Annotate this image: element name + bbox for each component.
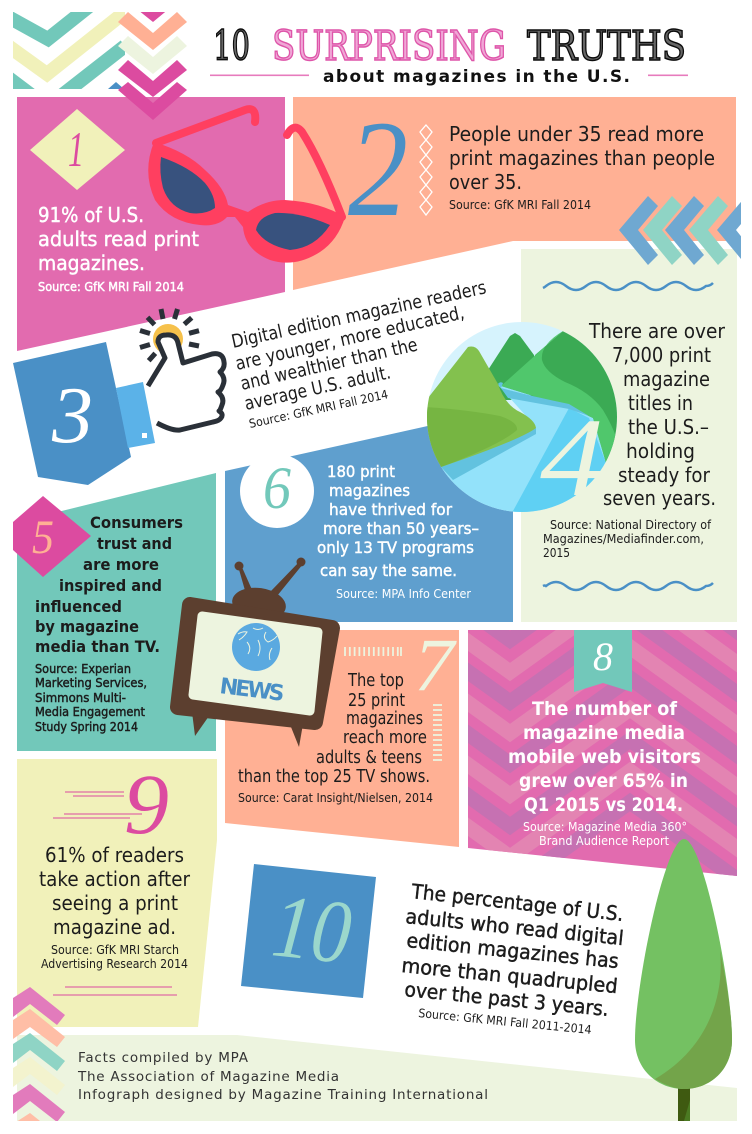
subtitle: about magazines in the U.S.	[323, 67, 630, 87]
panel 2: peach	[293, 97, 736, 290]
panel 5 text: influenced	[35, 597, 122, 616]
panel 3 text: Source: GfK MRI Fall 2014	[248, 387, 389, 431]
panel 7 text: Source: Carat Insight/Nielsen, 2014	[238, 790, 433, 805]
panel 2 text: Source: GfK MRI Fall 2014	[449, 198, 591, 212]
panel 5 text: media than TV.	[35, 637, 160, 656]
panel 10 text: adults who read digital	[404, 904, 625, 950]
panel 1 text: adults read print	[38, 227, 199, 251]
decorative chevrons: bottom left	[13, 987, 65, 1134]
panel 7 text: The top	[347, 671, 404, 691]
chevrons pointing left	[619, 196, 752, 265]
title: SURPRISING	[272, 22, 506, 70]
panel 10 text: The percentage of U.S.	[410, 879, 625, 926]
number 5: 5	[32, 511, 54, 564]
panel 5 text: Consumers	[90, 513, 183, 532]
panel 4 text: seven years.	[603, 486, 716, 510]
panel 1: pink	[17, 97, 285, 351]
panel 7 text: reach more	[343, 728, 427, 748]
panel 7 text: 25 print	[348, 691, 405, 711]
panel 6 text: can say the same.	[320, 561, 457, 580]
panel 4 text	[543, 319, 726, 560]
icon: thumbs up	[140, 309, 224, 430]
number 3: 3	[51, 372, 93, 460]
icon: globe	[232, 623, 280, 671]
number 6: 6	[263, 455, 291, 521]
panel 6 text: magazines	[329, 481, 410, 500]
panel 9 text: 61% of readers	[45, 843, 184, 867]
number 7: 7	[414, 624, 458, 707]
illustration: tree	[635, 839, 732, 1121]
panel 6 text: 180 print	[327, 462, 395, 481]
wavy line bottom	[543, 582, 713, 590]
panel 1 text: magazines.	[38, 251, 145, 275]
panel 2 text: print magazines than people	[449, 146, 715, 170]
pink rules	[53, 987, 177, 995]
panel 9 text	[39, 843, 191, 971]
panel 4 text: Source: National Directory of	[550, 518, 712, 532]
panel 4: pale green	[521, 249, 737, 622]
panel 10 text: Source: GfK MRI Fall 2011-2014	[418, 1006, 592, 1037]
panel 4 text: magazine	[623, 367, 710, 391]
decorative chevrons: top left	[13, 12, 125, 89]
decorative chevrons: top centre	[118, 12, 187, 97]
panel 7 text: adults & teens	[316, 748, 422, 768]
subtitle rule left	[210, 74, 309, 76]
panel 5 text: are more	[83, 555, 159, 574]
panel 5 text: trust and	[97, 534, 172, 553]
panel 4 text: the U.S.–	[628, 415, 709, 439]
panel 4 text: steady for	[618, 463, 711, 487]
number 10: 10	[268, 876, 356, 983]
panel 8 text: The number of	[532, 698, 678, 720]
panel 5 text	[35, 513, 183, 734]
illustration: news television: NEWS	[218, 674, 286, 707]
panel 5 text: Simmons Multi-	[35, 691, 126, 705]
panel 9 text: Source: GfK MRI Starch	[51, 943, 179, 957]
panel 5 text: by magazine	[35, 617, 139, 636]
title: 10	[213, 22, 250, 70]
panel 1 text	[38, 203, 199, 294]
speed lines	[53, 792, 142, 818]
panel 5 text: Source: Experian	[35, 662, 131, 676]
panel 8 text	[508, 698, 701, 848]
panel 8 text: magazine media	[523, 722, 685, 744]
panel 2 text	[449, 122, 715, 212]
vertical tick column	[433, 705, 442, 760]
title	[213, 22, 686, 70]
panel 6: blue	[225, 407, 513, 622]
number 5 diamond	[13, 496, 91, 577]
number 2: 2	[348, 92, 408, 245]
panel 9: pale yellow	[17, 759, 217, 1027]
panel 8 text: Source: Magazine Media 360°	[523, 819, 687, 834]
panel 4 text: 7,000 print	[612, 343, 711, 367]
illustration: news television	[178, 558, 332, 747]
panel 5 text: Media Engagement	[35, 705, 145, 719]
panel 5: teal	[17, 473, 216, 751]
number 6 disc	[240, 454, 314, 528]
horizontal tick row	[345, 647, 401, 656]
panel 9 text: Advertising Research 2014	[41, 957, 188, 971]
panel 3: blue pocket tag	[13, 342, 131, 485]
panel 10 text	[401, 879, 625, 1037]
panel 2 text: over 35.	[449, 170, 522, 194]
panel 6 text: more than 50 years–	[323, 519, 479, 538]
panel 5 text: Study Spring 2014	[35, 720, 138, 734]
panel 9 text: take action after	[39, 867, 191, 891]
panel 3 text	[230, 277, 488, 431]
footer credits	[77, 1050, 488, 1103]
panel 4 text: titles in	[628, 391, 693, 415]
footer band	[17, 1035, 737, 1121]
panel 7 text: than the top 25 TV shows.	[238, 767, 430, 787]
footer credits: The Association of Magazine Media	[77, 1069, 339, 1085]
panel 6 text: Source: MPA Info Center	[336, 587, 471, 601]
panel 4 text: There are over	[588, 319, 726, 343]
footer credits: Facts compiled by MPA	[78, 1050, 249, 1066]
illustration: sunglasses	[148, 109, 345, 263]
panel 6 text	[317, 462, 479, 601]
diamond column	[420, 125, 432, 215]
panel 7 text	[238, 671, 433, 805]
panel 4 text: 2015	[543, 546, 570, 560]
panel 4 text: Magazines/Mediafinder.com,	[543, 532, 704, 546]
panel 8 text: grew over 65% in	[519, 770, 688, 792]
panel 10 text: more than quadrupled	[401, 953, 619, 998]
subtitle rule right	[648, 74, 688, 76]
number 9: 9	[124, 756, 169, 852]
wavy line top	[543, 282, 713, 290]
panel 3 text: and wealthier than the	[238, 335, 420, 395]
panel 6 text: only 13 TV programs	[317, 538, 474, 557]
panel 8 text: Q1 2015 vs 2014.	[524, 794, 683, 816]
shirt cuff	[116, 382, 155, 448]
panel 10: blue number square	[241, 864, 376, 998]
panel 1 text: 91% of U.S.	[38, 203, 144, 227]
panel 5 text: Marketing Services,	[35, 676, 147, 690]
panel 10 text: edition magazines has	[406, 928, 620, 973]
panel 3 text: Digital edition magazine readers	[230, 277, 488, 353]
panel 7: peach	[225, 630, 459, 847]
panel 5 text: inspired and	[59, 576, 162, 595]
number diamond 1	[30, 109, 125, 190]
panel 10 text: over the past 3 years.	[404, 977, 610, 1021]
panel 3 text: are younger, more educated,	[233, 303, 466, 375]
footer credits: Infograph designed by Magazine Training International	[78, 1087, 488, 1103]
panel 8: chevron pink	[468, 630, 737, 876]
number 8 ribbon	[574, 630, 632, 692]
panel 8 text: mobile web visitors	[508, 746, 701, 768]
number 8: 8	[593, 634, 613, 679]
panel 7 text: magazines	[346, 709, 423, 729]
number 4: 4	[540, 396, 605, 520]
illustration: landscape circle	[427, 322, 617, 512]
panel 8 text: Brand Audience Report	[539, 833, 669, 848]
front chevron overlapping panel 1	[118, 82, 187, 120]
panel 3 text: average U.S. adult.	[243, 362, 393, 415]
panel 4 text: holding	[626, 439, 695, 463]
panel 9 text: magazine ad.	[53, 915, 176, 939]
panel 1 text: Source: GfK MRI Fall 2014	[38, 280, 184, 294]
panel 9 text: seeing a print	[52, 891, 178, 915]
number 1: 1	[68, 121, 84, 177]
panel 6 text: have thrived for	[329, 500, 452, 519]
panel 2 text: People under 35 read more	[449, 122, 704, 146]
title: TRUTHS	[527, 22, 686, 70]
